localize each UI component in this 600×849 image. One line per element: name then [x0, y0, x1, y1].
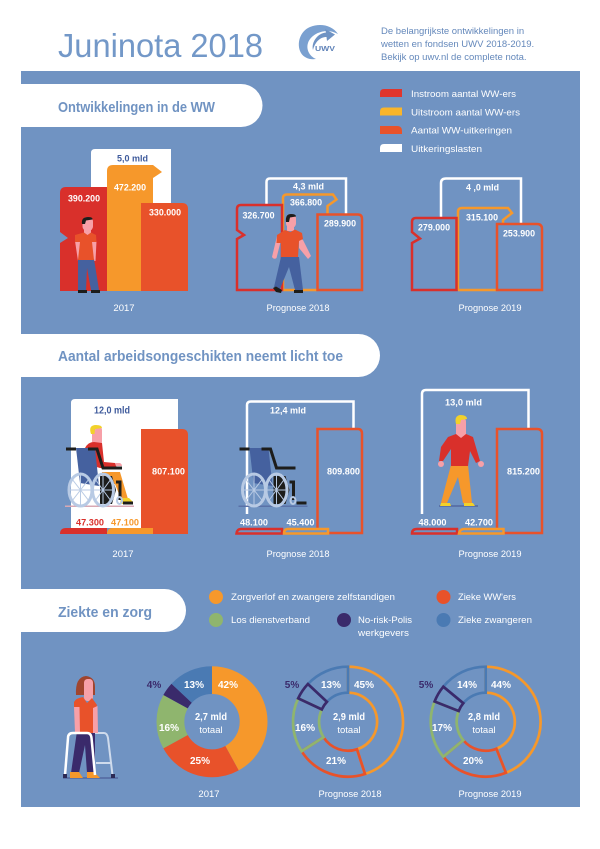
- legend: Aantal WW-uitkeringen: [411, 126, 512, 136]
- legend: werkgevers: [357, 628, 409, 639]
- legend: Zieke zwangeren: [458, 615, 532, 626]
- icon: person in wheelchair: [65, 425, 134, 507]
- icon: UWV logo: [299, 25, 338, 59]
- legend: Zorgverlof en zwangere zelfstandigen: [231, 592, 395, 603]
- donut chart 2017: totaal: [199, 725, 223, 736]
- donut chart Prognose 2019: totaal: [472, 725, 496, 736]
- donut chart 2017: 25%: [190, 756, 210, 767]
- chart: AO Prognose 2018: 48.100: [240, 518, 268, 528]
- chart: AO Prognose 2019: 42.700: [465, 518, 493, 528]
- donut chart Prognose 2018: 13%: [321, 680, 341, 691]
- heading: Aantal arbeidsongeschikten neemt licht toe: [58, 348, 343, 365]
- icon: woman with walker: [63, 676, 118, 779]
- label: 2017: 2017: [113, 303, 135, 314]
- heading: Ziekte en zorg: [58, 604, 152, 621]
- donut chart Prognose 2019: 2,8 mld: [468, 712, 500, 723]
- chart: AO 2017: 47.300: [76, 518, 104, 528]
- donut chart 2017: 4%: [147, 680, 161, 691]
- chart: AO Prognose 2019: 815.200: [507, 466, 540, 478]
- chart: WW 2017: 472.200: [114, 182, 146, 194]
- donut chart 2017: 13%: [184, 680, 204, 691]
- chart: AO Prognose 2018: 12,4 mld: [270, 406, 306, 416]
- label: Prognose 2019 (AO): Prognose 2019: [458, 549, 522, 560]
- chart: AO Prognose 2018: [236, 402, 362, 534]
- heading pill: [21, 334, 380, 377]
- chart: WW Prognose 2018: 326.700: [242, 210, 274, 222]
- icon: UWV logo: UWV: [315, 46, 335, 53]
- chart: WW 2017: [60, 149, 188, 293]
- heading pill: [21, 589, 186, 632]
- heading pill: [21, 84, 262, 127]
- chart: AO 2017: 47.100: [111, 518, 139, 528]
- legend: [209, 590, 532, 639]
- chart: WW Prognose 2018: 366.800: [290, 198, 322, 208]
- icon: walking man: [272, 214, 311, 293]
- chart: WW Prognose 2019: 4 ,0 mld: [466, 182, 499, 194]
- chart: WW Prognose 2018: 4,3 mld: [293, 182, 324, 192]
- heading: Ontwikkelingen in de WW: [58, 99, 216, 116]
- intro text: wetten en fondsen UWV 2018-2019.: [380, 39, 534, 50]
- chart: AO Prognose 2019: [412, 390, 542, 534]
- chart: AO Prognose 2019: 48.000: [418, 518, 446, 528]
- page title: Juninota 2018: [58, 27, 263, 64]
- donut chart Prognose 2019: 17%: [432, 723, 452, 734]
- icon: empty wheelchair: [238, 448, 308, 507]
- donut chart 2017: 16%: [159, 723, 179, 734]
- legend: Uitstroom aantal WW-ers: [411, 108, 520, 118]
- label: Prognose 2018 (WW): Prognose 2018: [266, 303, 330, 314]
- donut chart 2017: 2,7 mld: [195, 712, 227, 723]
- chart: WW 2017: 390.200: [68, 194, 100, 204]
- chart: AO 2017: 12,0 mld: [94, 406, 130, 416]
- panel: Ontwikkelingen in de WW: [21, 84, 542, 314]
- donut chart Prognose 2019: 14%: [457, 680, 477, 691]
- chart: AO Prognose 2019: 13,0 mld: [445, 398, 482, 408]
- legend: Zieke WW'ers: [458, 592, 516, 603]
- label: Prognose 2018 (donut): Prognose 2018: [318, 789, 382, 800]
- label: Prognose 2019 (donut): Prognose 2019: [458, 789, 522, 800]
- label: 2017 (AO): 2017: [112, 549, 134, 560]
- donut chart Prognose 2019: [419, 667, 541, 777]
- chart: WW Prognose 2019: 315.100: [466, 212, 498, 224]
- legend: Uitkeringslasten: [411, 144, 482, 155]
- donut chart Prognose 2018: [285, 667, 403, 777]
- label: 2017 (donut): 2017: [198, 789, 220, 800]
- chart: WW Prognose 2018: 289.900: [324, 218, 356, 230]
- chart: WW Prognose 2019: 253.900: [503, 228, 535, 240]
- donut chart Prognose 2019: 5%: [419, 680, 433, 691]
- chart: AO Prognose 2018: 809.800: [327, 466, 360, 478]
- legend: Los dienstverband: [231, 615, 310, 626]
- donut chart Prognose 2018: 16%: [295, 723, 315, 734]
- icon: standing man: [75, 217, 100, 293]
- intro text: De belangrijkste ontwikkelingen in: [381, 26, 524, 37]
- intro text: Bekijk op uwv.nl de complete nota.: [381, 52, 527, 63]
- label: Prognose 2018 (AO): Prognose 2018: [266, 549, 330, 560]
- donut chart Prognose 2018: 21%: [326, 756, 346, 767]
- chart: WW 2017: 330.000: [149, 208, 181, 218]
- donut chart Prognose 2019: 44%: [491, 680, 511, 691]
- chart: WW Prognose 2018: [237, 178, 362, 293]
- donut chart Prognose 2018: 45%: [354, 680, 374, 691]
- chart: WW Prognose 2019: [412, 178, 542, 290]
- legend: No-risk-Polis: [358, 615, 412, 626]
- icon: walking man in red: [438, 415, 484, 507]
- donut chart 2017: 42%: [218, 680, 238, 691]
- chart: WW 2017: 5,0 mld: [117, 154, 148, 164]
- panel: Aantal arbeidsongeschikten: [21, 334, 542, 560]
- legend: [380, 89, 520, 155]
- label: Prognose 2019 (WW): Prognose 2019: [458, 303, 522, 314]
- donut chart Prognose 2018: 2,9 mld: [333, 712, 365, 723]
- donut chart Prognose 2018: totaal: [337, 725, 361, 736]
- donut chart Prognose 2019: 20%: [463, 756, 483, 767]
- chart: AO Prognose 2018: 45.400: [286, 518, 314, 528]
- chart: AO 2017: 807.100: [152, 466, 185, 478]
- chart: WW Prognose 2019: 279.000: [418, 222, 450, 234]
- legend: Instroom aantal WW-ers: [411, 89, 516, 100]
- donut chart Prognose 2018: 5%: [285, 680, 299, 691]
- chart: AO 2017: [60, 399, 188, 534]
- panel: Ziekte en zorg: [21, 589, 541, 800]
- donut chart 2017: [147, 680, 254, 767]
